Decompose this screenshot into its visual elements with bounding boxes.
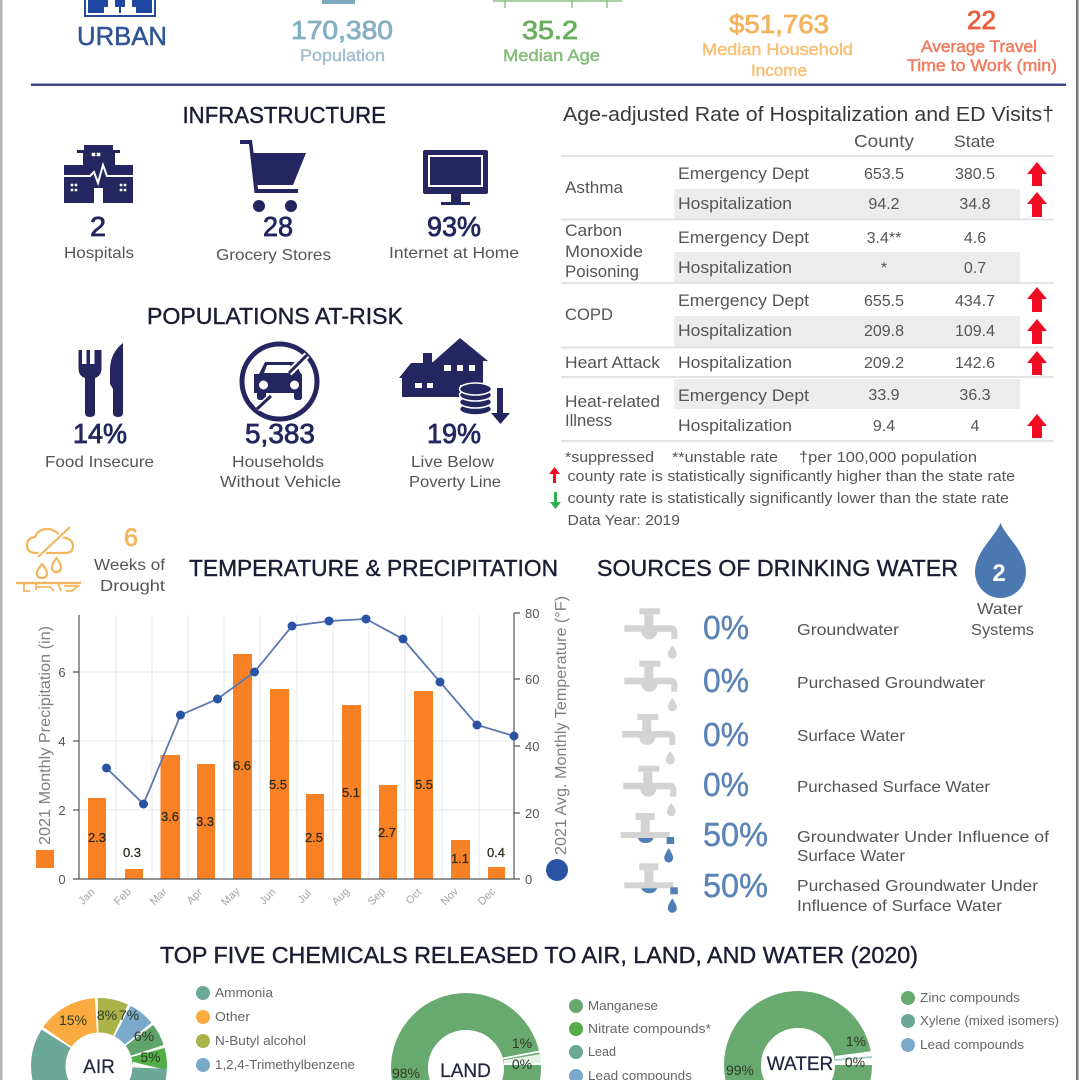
bar value labels: 2.7 [378,825,396,840]
source: surface water [622,714,906,764]
source: groundwater: 0% [703,609,749,646]
legend: land: Manganese [588,999,658,1013]
row: heat-related illness: Illness [565,412,612,430]
stat: population [291,0,393,65]
right axis ticks [525,606,539,887]
table footnotes and legend: Data Year: 2019 [568,512,680,529]
source: groundwater under influence [621,813,1050,865]
stat: weeks of drought: 6 [124,524,138,552]
icon: drought cloud [16,527,81,591]
legend: land [569,999,711,1080]
row: heat-related illness: 4 [971,418,980,435]
month labels [76,885,498,908]
bar value labels: 3.6 [161,809,179,824]
legend: water [901,991,1059,1052]
stat: median age [493,0,622,65]
legend: water: Zinc compounds [920,991,1020,1005]
source: purchased surface water [623,766,991,816]
stat: below poverty line [409,418,501,491]
donut chart: air: 8% [97,1007,117,1023]
donut chart: land: 0% [512,1056,532,1072]
stat: household income: $51,763 [729,9,829,39]
heading: sources of drinking water: SOURCES OF DRINKING WATER [597,555,958,581]
month labels: May [219,885,243,908]
row: heat-related illness: 36.3 [959,387,991,404]
stat: travel time: Average Travel [921,38,1037,56]
legend: land: Nitrate compounds* [588,1022,711,1036]
legend: land: Lead [588,1045,616,1059]
stat: median age: Median Age [503,46,600,65]
row: carbon monoxide poisoning: 3.4** [867,230,901,247]
row: carbon monoxide poisoning: Hospitalization [678,259,792,277]
row: copd: Hospitalization [678,322,792,340]
bar value labels: 5.5 [269,777,287,792]
panel: sources of drinking water [597,523,1050,915]
donut chart: air [48,1007,161,1080]
row: copd: 209.8 [864,323,904,340]
stat: weeks of drought [94,524,166,595]
row: heat-related illness: Emergency Dept [678,387,809,405]
donut chart: water: 99% [726,1062,754,1078]
stat: household income: Median Household [702,40,853,59]
icon: water drop with systems count: 2 [992,560,1006,587]
stat: population: Population [300,46,385,65]
row: heat-related illness: Hospitalization [678,417,792,435]
stat: grocery stores: 28 [263,211,293,242]
stat: hospitals [64,211,134,262]
row: asthma: Emergency Dept [678,165,809,183]
row: asthma [565,165,995,213]
month labels: Jul [296,888,314,906]
legend: air: N-Butyl alcohol [215,1034,306,1048]
donut chart: water [726,1010,873,1080]
table footnotes and legend: county rate is statistically significantly lower than the state rate [568,490,1009,507]
stat: households without vehicle [220,418,341,491]
panel: populations at-risk [45,303,510,491]
heading: temperature and precipitation: TEMPERATURE & PRECIPITATION [189,555,558,581]
bar value labels: 2.3 [88,830,106,845]
bar value labels: 0.3 [123,845,141,860]
bar value labels: 2.5 [305,830,323,845]
month labels: Oct [404,887,424,907]
stat: food insecure [45,418,154,471]
stat: grocery stores: Grocery Stores [216,247,331,264]
stat: household income: Income [751,61,807,80]
source: purchased surface water: Purchased Surface Water [797,779,991,796]
source: groundwater under influence: Groundwater Under Influence of [797,829,1050,846]
icon: fork and knife [78,343,123,417]
donut chart: land [392,1012,542,1080]
table footnotes and legend: county rate is statistically significantly higher than the state rate [568,468,1015,485]
legend: water: Xylene (mixed isomers) [920,1014,1059,1028]
donut chart: water: 0% [845,1054,865,1070]
right axis ticks: 0 [525,872,532,887]
stat: water systems: Water [977,601,1024,618]
stat: hospitals: Hospitals [64,245,134,262]
bar value labels: 3.3 [196,814,214,829]
bar value labels: 6.6 [233,758,251,773]
heading: populations at-risk: POPULATIONS AT-RISK [147,303,404,329]
bar value labels [88,758,505,866]
row: copd: 109.4 [955,323,995,340]
donut chart: air: 7% [119,1007,139,1023]
panel: hospitalization table [549,103,1054,529]
row: heart attack: Heart Attack [565,354,661,372]
stat: travel time [907,5,1057,75]
header stats band [77,0,1057,80]
donut chart: air: 15% [59,1012,87,1028]
column headers: State [954,132,995,151]
donut chart: water: WATER [767,1054,833,1075]
icon: water drop with systems count [975,523,1026,598]
panel: temperature and precipitation [16,524,570,908]
row: heat-related illness: Heat-related [565,393,660,411]
right axis ticks: 60 [525,672,539,687]
row: heart attack [565,354,995,372]
donut chart: air: 6% [134,1028,154,1044]
donut chart: air: 5% [140,1049,161,1065]
table footnotes and legend: *suppressed [565,449,654,466]
row: heat-related illness [565,387,991,435]
stat: water systems: Systems [971,622,1034,639]
source: surface water: Surface Water [797,728,906,745]
stat: household income [702,9,853,80]
heading: infrastructure: INFRASTRUCTURE [182,102,386,128]
stat: grocery stores [216,211,331,264]
month labels: Apr [185,886,205,907]
source: purchased groundwater under influence: Purchased Groundwater Under [797,878,1039,895]
month labels: Sep [366,886,388,908]
icon: red up arrows [1027,162,1047,438]
stat: hospitals: 2 [90,211,106,242]
stat: population: 170,380 [291,15,393,45]
table footnotes and legend: †per 100,000 population [799,449,977,466]
stat: food insecure: Food Insecure [45,454,154,471]
bar value labels: 1.1 [451,851,469,866]
source: groundwater: Groundwater [797,622,900,639]
row: carbon monoxide poisoning: Monoxide [565,243,643,261]
source: purchased groundwater: 0% [703,662,749,699]
source: groundwater under influence: Surface Water [797,848,906,865]
column headers [854,131,995,151]
precipitation bars [88,654,505,879]
stat: urban: URBAN [77,21,167,51]
source: purchased groundwater under influence: 50% [703,867,768,904]
row: carbon monoxide poisoning: * [881,260,887,277]
icon: shopping cart [240,140,306,212]
temperature line [102,614,518,808]
table footnotes and legend: **unstable rate [672,449,778,466]
row: copd: 434.7 [955,293,995,310]
right axis title and legend marker [546,596,570,881]
stat: water systems [971,601,1034,639]
stat: households without vehicle: Without Vehicle [220,474,341,491]
stat: median age: 35.2 [522,15,578,45]
donut chart: land: 1% [512,1035,532,1051]
icon: urban building [85,0,155,16]
row: asthma: 380.5 [955,166,995,183]
right axis ticks: 80 [525,606,539,621]
stat: food insecure: 14% [73,418,127,449]
right axis ticks: 20 [525,806,539,821]
icon: hospital [64,145,133,203]
source: surface water: 0% [703,716,749,753]
row: asthma: Asthma [565,179,624,197]
month labels: Jan [76,886,97,907]
source: groundwater under influence: 50% [703,816,768,853]
column headers: County [854,131,914,151]
left axis title and legend swatch: 2021 Monthly Precipitation (in) [37,626,54,845]
row: asthma: 34.8 [959,196,991,213]
donut chart: air: AIR [83,1057,115,1078]
bar value labels: 0.4 [487,845,505,860]
stat: travel time: 22 [967,5,996,35]
table footnotes and legend [549,449,1015,529]
row: heat-related illness: 33.9 [868,387,900,404]
source: purchased groundwater: Purchased Groundwater [797,675,986,692]
left axis ticks [58,665,66,887]
row: carbon monoxide poisoning: Emergency Dept [678,229,809,247]
combo chart [36,596,570,908]
row: asthma: 94.2 [868,196,900,213]
row: copd: Emergency Dept [678,292,809,310]
bar value labels: 5.5 [415,777,433,792]
row: asthma: 653.5 [864,166,904,183]
month labels: Aug [330,886,352,908]
source: purchased groundwater under influence: Influence of Surface Water [797,898,1003,915]
icon: no vehicle [242,344,317,419]
row: carbon monoxide poisoning: 4.6 [964,230,986,247]
month labels: Mar [148,886,170,908]
stat: households without vehicle: 5,383 [245,418,315,449]
month labels: Dec [476,885,498,908]
stat: travel time: Time to Work (min) [907,57,1057,75]
legend: air: 1,2,4-Trimethylbenzene [215,1058,355,1072]
month labels: Nov [439,885,461,908]
source: purchased groundwater [624,661,986,711]
icon: house with coins and down arrow [399,338,510,424]
month labels: Jun [257,886,278,907]
stat: weeks of drought: Weeks of [94,557,166,574]
stat: weeks of drought: Drought [100,578,166,595]
row: copd: 655.5 [864,293,904,310]
row: heart attack: 142.6 [955,355,995,372]
row: copd [565,292,995,340]
stat: below poverty line: Poverty Line [409,474,501,491]
row: carbon monoxide poisoning [565,222,986,281]
stat: internet at home: Internet at Home [389,245,519,262]
source: groundwater [624,608,900,659]
source: purchased surface water: 0% [703,766,749,803]
row: heart attack: 209.2 [864,355,904,372]
row: carbon monoxide poisoning: Carbon [565,222,622,240]
icon: monitor [423,150,488,205]
row: asthma: Hospitalization [678,195,792,213]
stat: internet at home: 93% [427,211,481,242]
month labels: Feb [112,886,134,908]
donut chart: water: 1% [846,1033,866,1049]
stat: internet at home [389,211,519,262]
legend: air [196,986,355,1072]
heading: top five chemicals: TOP FIVE CHEMICALS RELEASED TO AIR, LAND, AND WATER (2020) [160,942,918,968]
legend: water: Lead compounds [920,1038,1024,1052]
row: carbon monoxide poisoning: Poisoning [565,263,639,281]
left axis ticks: 0 [58,872,66,887]
row: copd: COPD [565,306,613,324]
row: heart attack: Hospitalization [678,354,792,372]
row: carbon monoxide poisoning: 0.7 [964,260,986,277]
left axis ticks: 6 [58,665,66,680]
stat: below poverty line: 19% [427,418,481,449]
right axis title and legend marker: 2021 Avg. Monthly Temperature (°F) [553,596,570,855]
left axis ticks: 4 [58,734,66,749]
table title: Age-adjusted Rate of Hospitalization and ED Visits† [563,103,1054,126]
bar value labels: 5.1 [342,785,360,800]
right axis ticks: 40 [525,739,539,754]
legend: air: Other [215,1010,250,1024]
source: purchased groundwater under influence [624,863,1039,915]
left axis ticks: 2 [58,803,66,818]
stat: households without vehicle: Households [232,454,324,471]
panel: infrastructure [64,102,519,264]
panel: top five chemicals [48,942,1059,1080]
legend: air: Ammonia [215,986,273,1000]
row: heat-related illness: 9.4 [873,418,895,435]
stat: below poverty line: Live Below [411,454,494,471]
